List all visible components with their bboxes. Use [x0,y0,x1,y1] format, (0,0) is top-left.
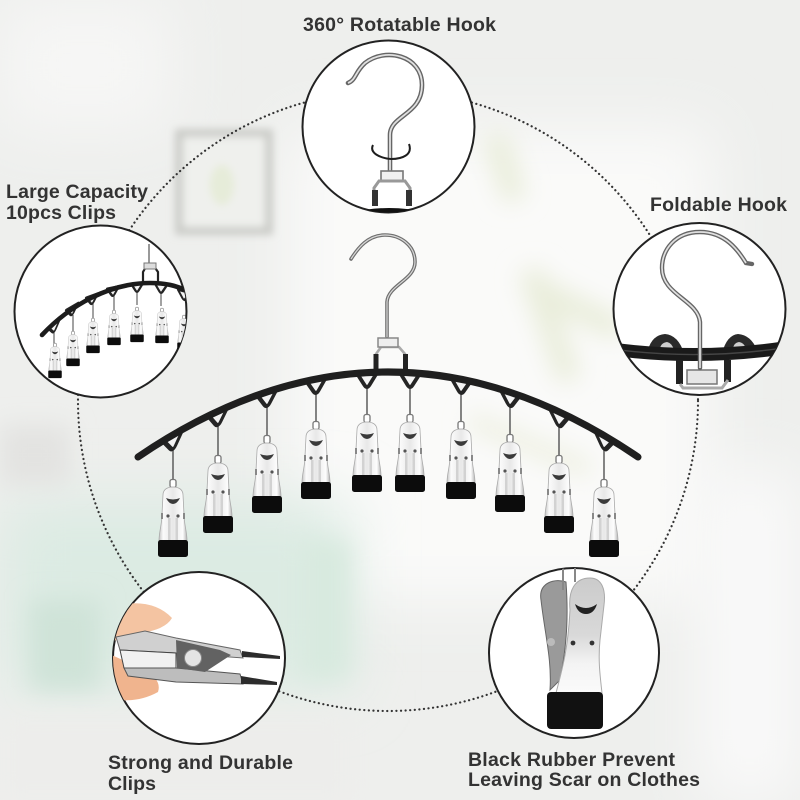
mini bar [42,283,190,335]
bar with bumps closeup [612,334,790,355]
clip closeup [116,631,280,685]
callout circle: black rubber tip [489,566,659,738]
hook closeup [662,232,752,368]
swivel bracket [374,338,408,370]
wires [173,386,604,480]
crescent highlight [575,604,597,614]
clip front body [556,578,604,693]
mini clips [48,307,191,378]
mini loops [49,285,186,334]
label: large capacity [6,181,148,224]
folded bracket closeup [676,360,731,388]
main hanger product [138,235,638,557]
hanging loops [163,373,614,455]
callout circle: strong clip [105,572,285,744]
label: strong clips: Clips [108,773,156,795]
callout circle: large capacity [14,226,191,398]
dotted connecting ring [78,91,698,711]
rivets [547,638,594,646]
curved bar [138,372,638,457]
rear clip arm [541,581,567,690]
bar closeup [367,208,410,212]
rubber tip [547,692,603,729]
rotation arrow [372,144,410,159]
label: black rubber [468,749,700,791]
label: large capacity: 10pcs Clips [6,202,116,224]
label: strong clips: Strong and Durable [108,752,293,774]
hook closeup [348,55,422,172]
label: black rubber: Black Rubber Prevent [468,749,676,771]
label: rotatable hook: 360° Rotatable Hook [303,14,496,36]
label: strong clips [108,752,293,795]
wire loop [563,566,575,590]
callout circle: rotatable hook [302,40,474,216]
ten clips [158,414,619,557]
label: foldable hook: Foldable Hook [650,194,787,216]
hook [351,235,415,337]
mini bracket [143,244,158,283]
label: large capacity: Large Capacity [6,181,148,203]
label: black rubber: Leaving Scar on Clothes [468,769,700,791]
swivel bracket closeup [372,171,412,206]
fingers [113,603,172,700]
mini wires [54,290,161,347]
callout circle: foldable hook [612,223,790,395]
